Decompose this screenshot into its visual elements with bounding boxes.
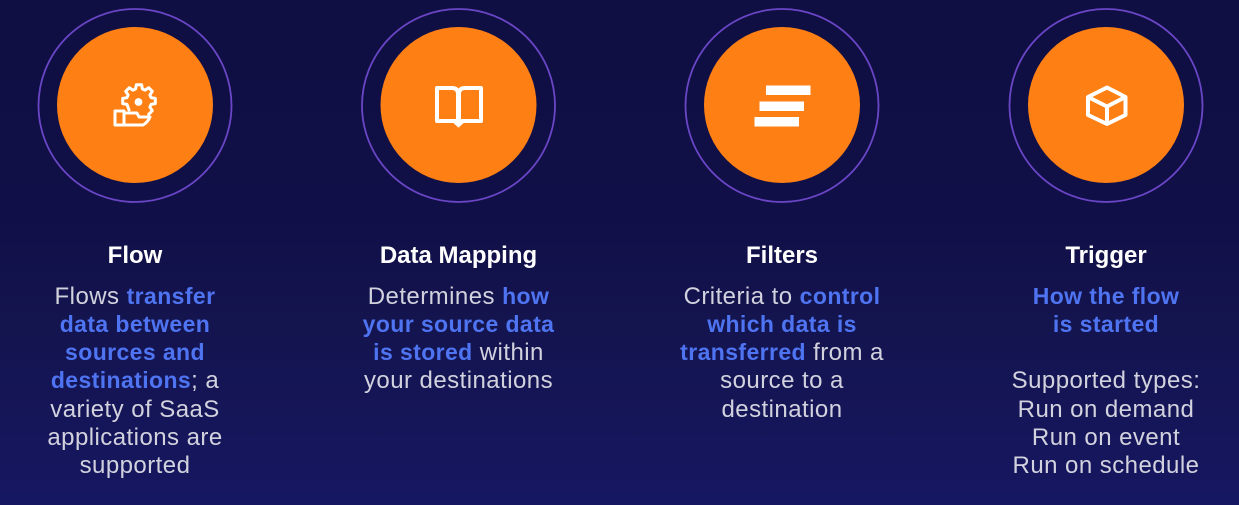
- circle: flow: [38, 9, 232, 202]
- text: flow description: variety of SaaS: [50, 396, 220, 423]
- circle: filters: [686, 9, 878, 202]
- text: trigger description: Supported types:: [1012, 367, 1200, 394]
- heading: data mapping: Data Mapping: [380, 242, 537, 269]
- text: flow description: Flows transfer: [55, 283, 215, 310]
- heading: trigger: Trigger: [1065, 242, 1147, 269]
- text: data mapping description: [362, 283, 554, 394]
- text: data mapping description: Determines how: [368, 283, 549, 310]
- column: filters: [680, 242, 884, 423]
- text: trigger description: Run on schedule: [1013, 452, 1199, 479]
- circle: data mapping: [362, 9, 555, 202]
- heading: flow: Flow: [108, 242, 162, 269]
- text: trigger description: How the flow: [1033, 283, 1179, 309]
- text: trigger description: [1012, 283, 1200, 479]
- text: flow description: data between: [60, 311, 210, 337]
- text: flow description: supported: [80, 452, 190, 479]
- text: filters description: destination: [721, 396, 843, 423]
- text: filters description: Criteria to control: [684, 283, 880, 310]
- text: data mapping description: your destinations: [364, 367, 553, 394]
- icon: cube: [1088, 88, 1126, 124]
- text: filters description: which data is: [707, 311, 857, 337]
- text: trigger description: Run on demand: [1018, 396, 1194, 423]
- text: flow description: destinations; a: [51, 367, 219, 394]
- text: flow description: [47, 283, 223, 479]
- column: trigger: [1012, 242, 1200, 479]
- text: trigger description: Run on event: [1032, 424, 1180, 451]
- text: filters description: transferred from a: [680, 339, 884, 366]
- circle: trigger: [1010, 9, 1202, 202]
- text: filters description: source to a: [720, 367, 844, 394]
- text: flow description: sources and: [65, 339, 205, 365]
- column: data mapping: [362, 242, 554, 394]
- icon: open book: [437, 88, 481, 127]
- text: data mapping description: is stored within: [373, 339, 544, 366]
- icon: gear on hand: [115, 85, 155, 125]
- column: flow: [47, 242, 223, 479]
- heading: filters: Filters: [746, 242, 818, 269]
- text: flow description: applications are: [47, 424, 223, 451]
- text: data mapping description: your source data: [363, 311, 554, 337]
- text: trigger description: is started: [1053, 311, 1159, 337]
- text: filters description: [680, 283, 884, 423]
- icon: filter bars: [754, 86, 810, 126]
